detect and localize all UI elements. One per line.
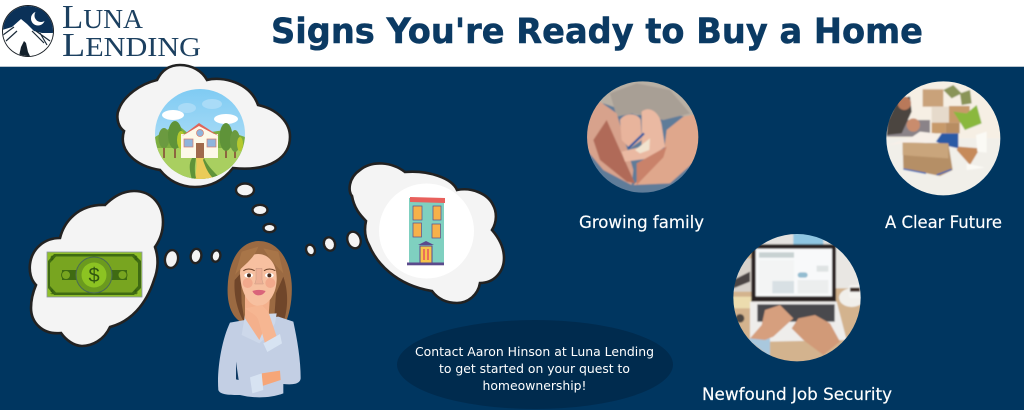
hair back — [228, 241, 292, 324]
sleeve and arms — [263, 334, 282, 352]
icon: dollar bill: $ — [50, 289, 54, 296]
photo: growing family hands — [587, 81, 698, 193]
title: Signs You're Ready to Buy a Home — [271, 12, 923, 52]
neck and face — [245, 293, 270, 340]
callout: contact ellipse — [397, 320, 673, 409]
callout: contact ellipse: to get started on your quest to — [439, 362, 630, 376]
label: newfound job security: Newfound Job Security — [702, 385, 892, 404]
thought cloud: apartment — [350, 163, 504, 303]
icon: dollar bill — [47, 252, 142, 297]
hand at chin — [245, 305, 277, 343]
photo: couple with moving boxes — [883, 78, 1003, 198]
thought bubbles from woman to apartment — [305, 230, 363, 257]
thought cloud: house — [117, 65, 290, 187]
thought bubbles from woman to money — [164, 248, 221, 269]
callout: contact ellipse: homeownership! — [482, 379, 586, 393]
icon: apartment building in circle — [379, 184, 474, 278]
logo wordmark: LENDING — [62, 27, 201, 64]
icon: dollar bill: $ — [134, 289, 138, 296]
callout: contact ellipse: Contact Aaron Hinson at Luna Lending — [415, 345, 654, 359]
logo wordmark — [62, 0, 201, 64]
shirt — [218, 317, 301, 397]
collar — [242, 313, 277, 343]
shirt shadow gap — [236, 362, 239, 380]
logo: Luna Lending — [2, 5, 200, 57]
icon: dollar bill: $ — [134, 255, 138, 262]
woman thinking — [218, 241, 301, 397]
icon: moon and mountain badge — [2, 5, 54, 57]
label: a clear future: A Clear Future — [885, 213, 1002, 232]
icon: dollar bill: $ — [88, 265, 100, 287]
label: growing family: Growing family — [579, 213, 704, 232]
icon: dollar bill: $ — [50, 255, 54, 262]
thought cloud: money — [30, 191, 163, 346]
logo wordmark: LUNA — [62, 0, 144, 36]
thought bubbles from woman to house — [236, 184, 276, 232]
icon: house scene in circle — [155, 89, 245, 183]
photo: hands typing on laptop — [732, 232, 864, 363]
header band — [0, 0, 1024, 67]
